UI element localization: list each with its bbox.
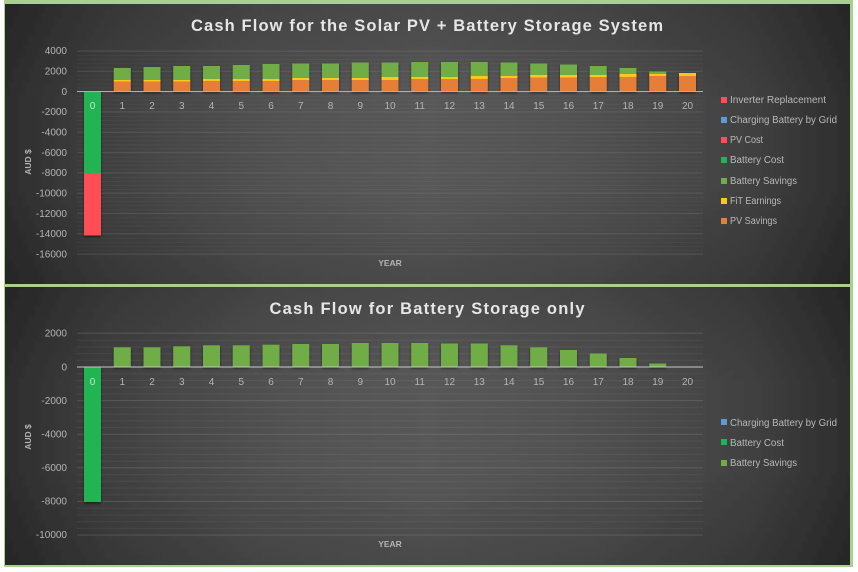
legend: Charging Battery by Grid <box>730 418 837 429</box>
year labels: 2 <box>149 377 155 388</box>
y axis labels: 2000 <box>45 66 67 78</box>
legend: Battery Savings <box>730 458 797 469</box>
year labels: 19 <box>652 377 664 388</box>
year labels: 3 <box>179 377 185 388</box>
year labels: 14 <box>503 101 515 112</box>
x axis title: YEAR <box>378 539 402 549</box>
y axis labels <box>36 46 67 260</box>
year labels: 12 <box>444 377 455 388</box>
year labels: 14 <box>503 377 515 388</box>
year labels: 19 <box>652 101 664 112</box>
year labels: 9 <box>357 101 363 112</box>
year labels: 4 <box>209 101 215 112</box>
stacked bars <box>84 62 696 236</box>
y axis labels: -2000 <box>41 396 67 407</box>
legend: PV Savings <box>730 216 777 227</box>
year labels: 15 <box>533 101 545 112</box>
year labels: 4 <box>209 377 215 388</box>
year labels: 13 <box>474 101 485 112</box>
y axis labels: -2000 <box>41 107 67 118</box>
chart title: Cash Flow for Battery Storage only <box>270 300 585 318</box>
year labels: 11 <box>415 377 425 388</box>
year labels: 16 <box>563 377 574 388</box>
year labels: 6 <box>268 101 274 112</box>
year labels <box>90 101 693 112</box>
legend: PV Cost <box>730 135 763 146</box>
y axis labels: 0 <box>61 87 67 98</box>
year labels: 5 <box>238 377 244 388</box>
y axis labels: 0 <box>61 362 67 374</box>
year labels: 13 <box>474 377 485 388</box>
year labels: 12 <box>444 101 455 112</box>
y axis labels: -10000 <box>36 188 67 200</box>
year labels: 17 <box>593 101 604 112</box>
legend: Battery Cost <box>730 155 784 166</box>
year labels: 20 <box>682 101 693 112</box>
legend: FiT Earnings <box>730 196 781 207</box>
y axis labels: -10000 <box>36 530 67 541</box>
year labels: 0 <box>90 377 96 388</box>
y axis title: AUD $ <box>23 149 33 175</box>
panel: battery storage cash flow <box>5 287 850 565</box>
year labels: 10 <box>384 101 396 112</box>
bars <box>84 343 666 502</box>
legend <box>721 418 837 469</box>
year labels: 17 <box>593 377 604 388</box>
panel: solar PV + battery cash flow <box>5 4 850 284</box>
year labels: 9 <box>357 377 363 388</box>
y axis labels: 2000 <box>45 328 67 340</box>
legend: Charging Battery by Grid <box>730 115 837 126</box>
y axis labels: -14000 <box>36 229 67 240</box>
year labels: 7 <box>298 377 304 388</box>
year labels: 15 <box>533 377 545 388</box>
year labels: 7 <box>298 101 304 112</box>
y axis labels: -8000 <box>41 496 67 508</box>
legend <box>721 95 837 227</box>
year labels: 1 <box>119 101 125 112</box>
y axis labels: -16000 <box>36 250 67 260</box>
year labels: 0 <box>90 101 96 112</box>
year labels: 8 <box>328 377 334 388</box>
year labels: 20 <box>682 377 693 388</box>
year labels: 6 <box>268 377 274 388</box>
year labels: 10 <box>384 377 396 388</box>
y axis labels: -4000 <box>41 430 67 440</box>
y axis title: AUD $ <box>23 424 33 450</box>
legend: Battery Savings <box>730 176 797 187</box>
y axis labels: -12000 <box>36 209 67 220</box>
year labels: 5 <box>238 101 244 112</box>
year labels: 8 <box>328 101 334 112</box>
year labels: 11 <box>415 101 425 112</box>
y axis labels: -4000 <box>41 128 67 138</box>
x axis title: YEAR <box>378 258 402 268</box>
year labels: 18 <box>622 101 634 112</box>
y axis labels: 4000 <box>45 46 67 57</box>
legend: Battery Cost <box>730 438 784 449</box>
year labels: 16 <box>563 101 574 112</box>
year labels: 1 <box>119 377 125 388</box>
year labels: 3 <box>179 101 185 112</box>
y axis labels <box>36 328 67 541</box>
year labels: 2 <box>149 101 155 112</box>
y axis labels: -6000 <box>41 148 67 159</box>
y axis labels: -8000 <box>41 168 67 179</box>
year labels: 18 <box>622 377 634 388</box>
y axis labels: -6000 <box>41 463 67 474</box>
chart title: Cash Flow for the Solar PV + Battery Storage System <box>191 17 663 35</box>
legend: Inverter Replacement <box>730 95 826 106</box>
year labels <box>90 377 693 388</box>
